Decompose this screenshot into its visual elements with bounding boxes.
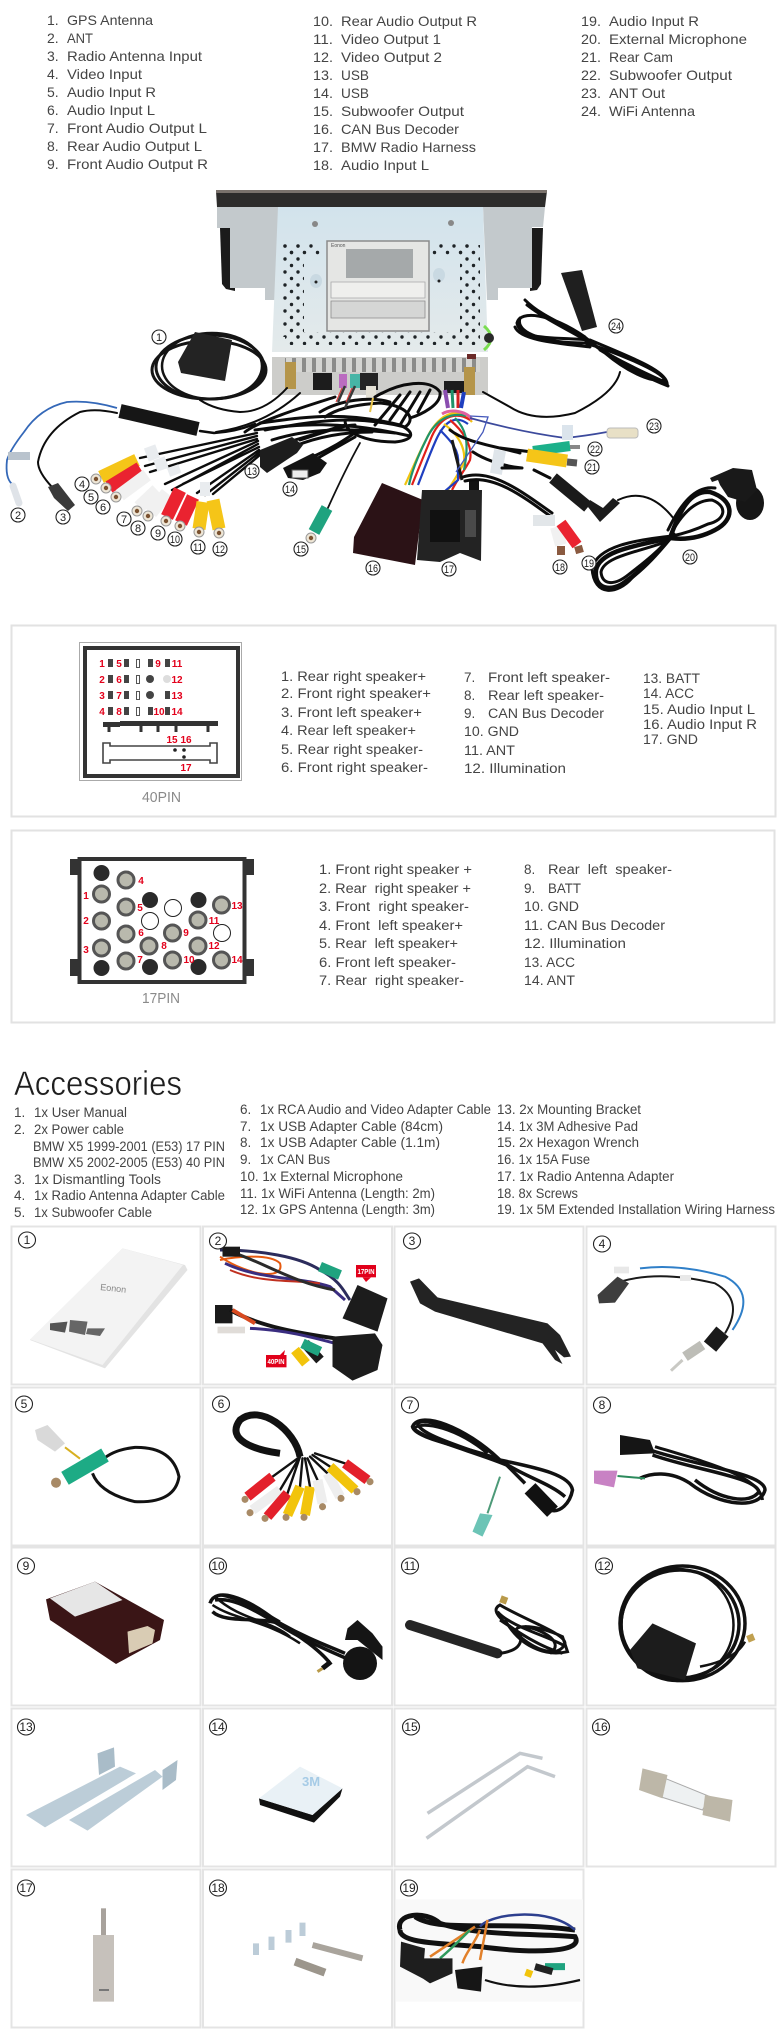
panel: item 17 radio antenna adapter (12, 1870, 200, 2028)
callout numbers 1 to 24 (11, 319, 697, 576)
40PIN connector diagram: 9 (155, 659, 161, 670)
panel: item 7 USB cable 84cm (394, 1388, 584, 1546)
text block: 40PIN pin list: 9. (464, 706, 475, 721)
text block: connector legend column 1: Rear Audio Output L (67, 138, 202, 154)
text block: connector legend column 3: 22. (581, 67, 601, 83)
text block: 40PIN pin list: 12. Illumination (464, 761, 566, 776)
panel: item 9 CAN bus: 9 (23, 1559, 30, 1573)
text block: accessories list column 1: 5. (14, 1205, 25, 1220)
text block: connector legend column 2: CAN Bus Decoder (341, 121, 459, 137)
text block: accessories list column 1: 2x Power cable (34, 1122, 124, 1137)
17PIN connector diagram: 5 (137, 903, 143, 914)
17PIN connector diagram: 2 (83, 916, 89, 927)
callout numbers 1 to 24: 20 (685, 552, 695, 564)
text block: connector legend column 2: Subwoofer Output (341, 103, 464, 119)
callout numbers 1 to 24: 11 (193, 542, 203, 554)
text block: 40PIN pin list: 6. Front right speaker- (281, 760, 428, 775)
text block: connector legend column 2 (313, 13, 477, 173)
head unit rear: Eonon (331, 243, 346, 249)
panel: item 19 extended wiring harness: 19 (402, 1881, 416, 1895)
40PIN connector diagram: 8 (116, 707, 122, 718)
text block: accessories list column 2: 8. (240, 1135, 251, 1150)
text block: connector legend column 2: Rear Audio Output R (341, 13, 477, 29)
text block: accessories list column 1: 1x User Manual (34, 1105, 127, 1120)
radio antenna cables 2 and 3 (7, 393, 300, 511)
40PIN connector diagram: 2 (99, 675, 105, 686)
panel: item 19 extended wiring harness (394, 1870, 584, 2028)
text block: connector legend column 3: External Microphone (609, 31, 747, 47)
text block: connector legend column 2: 14. (313, 85, 333, 101)
text block: accessories list column 2: 1x CAN Bus (260, 1152, 330, 1167)
text block: accessories list column 1: 1. (14, 1105, 25, 1120)
callout numbers 1 to 24: 1 (156, 332, 162, 344)
black wires to plugs (450, 430, 552, 516)
text block: 40PIN pin list: 10. GND (464, 724, 519, 739)
40PIN connector diagram: 16 (180, 735, 192, 746)
panel: item 11 WiFi antenna: 11 (404, 1559, 417, 1573)
text block: 17PIN pin list: 11. CAN Bus Decoder (524, 918, 666, 933)
panel: item 16 15A fuse (586, 1708, 776, 1866)
panel: item 14 3M adhesive pad: 14 (211, 1720, 225, 1734)
text block: 40PIN pin list: 13. BATT (643, 671, 700, 686)
callout numbers 1 to 24: 3 (60, 512, 66, 524)
external microphone 20 (534, 468, 764, 590)
panel: item 8 USB cable 1.1m: 8 (599, 1398, 606, 1412)
GPS antenna 1 (152, 332, 287, 412)
text block: 17PIN pin list: 4. Front left speaker+ (319, 918, 463, 933)
text block: 17PIN pin list: 5. Rear left speaker+ (319, 936, 458, 951)
callout numbers 1 to 24: 17 (444, 564, 454, 576)
text block: 17PIN pin list: 12. Illumination (524, 936, 626, 951)
product diagram: head unit with wiring (7, 190, 764, 590)
text block: connector legend column 3: 23. (581, 85, 601, 101)
17PIN connector diagram: 12 (208, 941, 220, 952)
text block: connector legend column 1: 9. (47, 156, 59, 172)
panel: item 17 radio antenna adapter: 17 (19, 1881, 33, 1895)
17PIN connector diagram: 13 (231, 901, 243, 912)
callout numbers 1 to 24: 16 (368, 563, 378, 575)
text block: 17PIN pin list: 10. GND (524, 899, 579, 914)
text block: accessories list column 1 (14, 1105, 225, 1220)
panel: item 13 mounting brackets: 13 (19, 1720, 33, 1734)
17PIN connector diagram: 9 (183, 928, 189, 939)
40PIN connector diagram: 15 (166, 735, 178, 746)
text block: connector legend column 2: 11. (313, 31, 333, 47)
panel: item 13 mounting brackets (12, 1708, 200, 1866)
main black cable bundle (245, 383, 440, 458)
panel: item 3 dismantling tool: 3 (409, 1234, 416, 1248)
panel: item 8 USB cable 1.1m (586, 1388, 776, 1546)
17PIN connector diagram: 8 (161, 941, 167, 952)
text block: 40PIN pin list: 16. Audio Input R (643, 717, 757, 732)
text block: 17PIN pin list: 9. (524, 881, 535, 896)
text block: connector legend column 1: 2. (47, 30, 59, 46)
text block: connector legend column 1: 6. (47, 102, 59, 118)
text block: 40PIN pin list: 17. GND (643, 732, 698, 747)
panel: item 10 external microphone (203, 1548, 392, 1706)
text block: connector legend column 3: ANT Out (609, 85, 665, 101)
text block: 40PIN pin list: 5. Rear right speaker- (281, 742, 423, 757)
text block: connector legend column 1: 7. (47, 120, 59, 136)
panel: item 5 subwoofer cable (12, 1388, 200, 1546)
text block: connector legend column 3 (581, 13, 747, 119)
text block: accessories list column 1: 1x Dismantling Tools (34, 1172, 161, 1187)
text block: accessories list column 1: 1x Radio Antenna Adapter Cable (34, 1188, 225, 1203)
text block: connector legend column 1 (47, 12, 208, 172)
panel: item 9 CAN bus (12, 1548, 200, 1706)
ANT out 23 (456, 416, 638, 475)
panel: item 1 user manual: Eonon (100, 1282, 127, 1295)
text block: connector legend column 1: Video Input (67, 66, 142, 82)
label: 17PIN: 17PIN (142, 991, 180, 1007)
text block: 17PIN pin list: 2. Rear right speaker + (319, 881, 471, 896)
panel: item 18 screws: 18 (211, 1881, 225, 1895)
text block: 17PIN pin list: 7. Rear right speaker- (319, 973, 464, 988)
text block: 17PIN pin list: 6. Front left speaker- (319, 955, 456, 970)
panel: 17PIN wiring (12, 830, 774, 1022)
text block: accessories list column 2 (240, 1102, 491, 1217)
text block: 17PIN pin list: Rear left speaker- (548, 862, 672, 877)
panel: item 7 USB cable 84cm: 7 (407, 1398, 414, 1412)
text block: connector legend column 3: 20. (581, 31, 601, 47)
panel: item 6 RCA audio video cable: 6 (218, 1397, 225, 1411)
panel: item 1 user manual (12, 1226, 200, 1384)
callout numbers 1 to 24: 9 (155, 528, 161, 540)
text block: accessories list column 3: 18. 8x Screws (497, 1186, 578, 1201)
text block: 40PIN pin list: 4. Rear left speaker+ (281, 723, 416, 738)
text block: 40PIN pin list: CAN Bus Decoder (488, 706, 605, 721)
panel: 40PIN wiring (12, 626, 776, 816)
40PIN connector diagram: 13 (171, 691, 183, 702)
audio input 18 and 19 (533, 515, 580, 555)
text block: 40PIN pin list: Front left speaker- (488, 670, 610, 685)
text block: accessories list column 2: 10. 1x External Microphone (240, 1169, 403, 1184)
text block: accessories list column 1: 4. (14, 1188, 25, 1203)
CAN bus decoder 16 (353, 483, 423, 565)
panel: item 5 subwoofer cable: 5 (21, 1397, 28, 1411)
text block: accessories list column 3 (497, 1102, 775, 1217)
callout numbers 1 to 24: 14 (285, 484, 295, 496)
text block: connector legend column 3: Audio Input R (609, 13, 699, 29)
text block: 17PIN pin list: BATT (548, 881, 581, 896)
callout numbers 1 to 24: 18 (555, 562, 565, 574)
40PIN connector diagram: 7 (116, 691, 122, 702)
text block: connector legend column 2: 16. (313, 121, 333, 137)
text block: connector legend column 1: 1. (47, 12, 59, 28)
text block: accessories list column 2: 1x RCA Audio and Video Adapter Cable (260, 1102, 491, 1117)
text block: accessories list column 2: 9. (240, 1152, 251, 1167)
text block: connector legend column 2: 13. (313, 67, 333, 83)
callout numbers 1 to 24: 5 (88, 492, 94, 504)
heading: Accessories: Accessories (14, 1065, 182, 1103)
text block: 40PIN pin list: 11. ANT (464, 743, 515, 758)
subwoofer output 22 and rear cam 21 (500, 446, 580, 468)
text block: connector legend column 1: Front Audio Output L (67, 120, 207, 136)
panel: item 6 RCA audio video cable (203, 1388, 392, 1546)
text block: connector legend column 3: 21. (581, 49, 601, 65)
text block: accessories list column 3: 17. 1x Radio Antenna Adapter (497, 1169, 674, 1184)
text block: connector legend column 1: Front Audio Output R (67, 156, 208, 172)
text block: connector legend column 3: 19. (581, 13, 601, 29)
text block: connector legend column 1: 5. (47, 84, 59, 100)
17PIN connector diagram: 1 (83, 891, 89, 902)
text block: connector legend column 1: Audio Input R (67, 84, 156, 100)
text block: connector legend column 1: 4. (47, 66, 59, 82)
panel: item 16 15A fuse: 16 (594, 1720, 608, 1734)
colored harness wires (405, 390, 472, 492)
WiFi antenna 24 (483, 270, 668, 417)
text block: accessories list column 2: 1x USB Adapter Cable (84cm) (260, 1119, 443, 1134)
text block: connector legend column 2: 18. (313, 157, 333, 173)
panel: item 11 WiFi antenna (394, 1548, 584, 1706)
text block: 40PIN pin list: 3. Front left speaker+ (281, 705, 422, 720)
text block: connector legend column 3: Rear Cam (609, 49, 673, 65)
text block: accessories list column 1: 2. (14, 1122, 25, 1137)
text block: 17PIN pin list: 3. Front right speaker- (319, 899, 469, 914)
callout numbers 1 to 24: 6 (100, 502, 106, 514)
text block: accessories list column 1: BMW X5 2002-2005 (E53) 40 PIN (33, 1155, 225, 1170)
17PIN connector diagram: 11 (209, 916, 220, 927)
text block: connector legend column 1: Radio Antenna Input (67, 48, 202, 64)
text block: 17PIN pin list: 1. Front right speaker + (319, 862, 472, 877)
40PIN connector diagram: 12 (171, 675, 183, 686)
USB cables 13 and 14 (260, 425, 355, 480)
callout numbers 1 to 24: 23 (649, 421, 659, 433)
text block: 17PIN pin list: 14. ANT (524, 973, 575, 988)
17PIN connector diagram: 6 (138, 928, 144, 939)
text block: 40PIN pin list: Rear left speaker- (488, 688, 604, 703)
40PIN connector diagram: 1 (99, 659, 105, 670)
text block: accessories list column 2: 6. (240, 1102, 251, 1117)
17PIN connector diagram: 14 (231, 955, 243, 966)
text block: accessories list column 3: 15. 2x Hexagon Wrench (497, 1135, 639, 1150)
callout numbers 1 to 24: 2 (15, 510, 21, 522)
text block: accessories list column 2: 7. (240, 1119, 251, 1134)
text block: accessories list column 2: 11. 1x WiFi Antenna (Length: 2m) (240, 1186, 435, 1201)
text block: connector legend column 1: 8. (47, 138, 59, 154)
17PIN connector diagram: 3 (83, 945, 89, 956)
text block: accessories list column 3: 14. 1x 3M Adhesive Pad (497, 1119, 638, 1134)
panel: item 4 radio antenna adapter cable (586, 1226, 776, 1384)
panel: item 15 hexagon wrenches: 15 (404, 1720, 418, 1734)
40PIN connector diagram: 5 (116, 659, 122, 670)
callout numbers 1 to 24: 13 (247, 466, 257, 478)
panel: item 3 dismantling tool (394, 1226, 584, 1384)
panel: item 2 power cables: 40PIN (268, 1359, 284, 1366)
text block: 40PIN pin list: 7. (464, 670, 475, 685)
callout numbers 1 to 24: 12 (215, 544, 225, 556)
17PIN connector diagram: 4 (138, 876, 144, 887)
40PIN connector diagram: 6 (116, 675, 122, 686)
text block: connector legend column 2: USB (341, 85, 369, 101)
RCA plugs 4 to 12 (91, 433, 260, 538)
panel: item 15 hexagon wrenches (394, 1708, 584, 1866)
text block: connector legend column 2: 10. (313, 13, 333, 29)
text block: connector legend column 1: GPS Antenna (67, 12, 153, 28)
subwoofer output 15 (306, 443, 360, 543)
text block: connector legend column 3: Subwoofer Output (609, 67, 732, 83)
callout numbers 1 to 24: 10 (170, 534, 180, 546)
text block: connector legend column 2: 12. (313, 49, 333, 65)
text block: accessories list column 3: 16. 1x 15A Fuse (497, 1152, 590, 1167)
40PIN connector diagram: 14 (171, 707, 183, 718)
text block: 17PIN pin list (319, 862, 672, 988)
text block: connector legend column 1: ANT (67, 30, 93, 46)
panel: item 2 power cables (203, 1226, 392, 1384)
text block: 40PIN pin list: 1. Rear right speaker+ (281, 669, 426, 684)
40PIN connector diagram: 4 (99, 707, 105, 718)
text block: 40PIN pin list: 2. Front right speaker+ (281, 686, 431, 701)
17PIN connector diagram: 7 (137, 955, 143, 966)
40PIN connector diagram (80, 642, 242, 780)
panel: item 2 power cables: 2 (215, 1234, 222, 1248)
text block: accessories list column 1: 3. (14, 1172, 25, 1187)
text block: accessories list column 1: BMW X5 1999-2001 (E53) 17 PIN (33, 1139, 225, 1154)
text block: connector legend column 2: 15. (313, 103, 333, 119)
panel: item 12 GPS antenna (586, 1548, 776, 1706)
text block: 40PIN pin list (281, 669, 757, 776)
callout numbers 1 to 24: 19 (584, 558, 594, 570)
40PIN connector diagram: 3 (99, 691, 105, 702)
17PIN connector diagram: 10 (183, 955, 195, 966)
panel: item 18 screws (203, 1870, 392, 2028)
callout numbers 1 to 24: 21 (587, 462, 597, 474)
text block: connector legend column 3: 24. (581, 103, 601, 119)
panel: item 14 3M adhesive pad: 3M (302, 1774, 320, 1789)
text block: accessories list column 2: 12. 1x GPS Antenna (Length: 3m) (240, 1202, 435, 1217)
callout numbers 1 to 24: 22 (590, 444, 600, 456)
text block: connector legend column 2: BMW Radio Harness (341, 139, 476, 155)
40PIN connector diagram: 10 (153, 707, 165, 718)
text block: connector legend column 2: Audio Input L (341, 157, 429, 173)
text block: connector legend column 2: 17. (313, 139, 333, 155)
text block: accessories list column 3: 19. 1x 5M Extended Installation Wiring Harness (497, 1202, 775, 1217)
40PIN connector diagram: 17 (180, 763, 192, 774)
panel: item 4 radio antenna adapter cable: 4 (599, 1237, 606, 1251)
text block: connector legend column 1: 3. (47, 48, 59, 64)
panel: item 1 user manual: 1 (24, 1233, 31, 1247)
head unit rear (216, 190, 547, 399)
label: 40PIN: 40PIN (142, 790, 181, 806)
text block: 17PIN pin list: 8. (524, 862, 535, 877)
callout numbers 1 to 24: 24 (611, 321, 621, 333)
panel: item 14 3M adhesive pad (203, 1708, 392, 1866)
40PIN connector diagram: 11 (172, 659, 183, 670)
callout numbers 1 to 24: 4 (79, 479, 85, 491)
text block: 40PIN pin list: 14. ACC (643, 686, 694, 701)
callout numbers 1 to 24: 8 (135, 523, 141, 535)
text block: 40PIN pin list: 15. Audio Input L (643, 702, 756, 717)
text block: accessories list column 2: 1x USB Adapter Cable (1.1m) (260, 1135, 440, 1150)
text block: 40PIN pin list: 8. (464, 688, 475, 703)
panel: item 2 power cables: 17PIN (358, 1269, 374, 1276)
text block: connector legend column 1: Audio Input L (67, 102, 155, 118)
text block: accessories list column 3: 13. 2x Mounting Bracket (497, 1102, 641, 1117)
text block: 17PIN pin list: 13. ACC (524, 955, 575, 970)
17PIN connector diagram (70, 859, 254, 982)
text block: connector legend column 2: Video Output 1 (341, 31, 441, 47)
text block: accessories list column 1: 1x Subwoofer Cable (34, 1205, 152, 1220)
callout numbers 1 to 24: 15 (296, 544, 306, 556)
callout numbers 1 to 24: 7 (121, 514, 127, 526)
panel: item 12 GPS antenna: 12 (597, 1559, 611, 1573)
panel: item 10 external microphone: 10 (211, 1559, 225, 1573)
text block: connector legend column 3: WiFi Antenna (609, 103, 695, 119)
BMW radio harness 17 (417, 480, 482, 562)
text block: connector legend column 2: USB (341, 67, 369, 83)
text block: connector legend column 2: Video Output 2 (341, 49, 442, 65)
